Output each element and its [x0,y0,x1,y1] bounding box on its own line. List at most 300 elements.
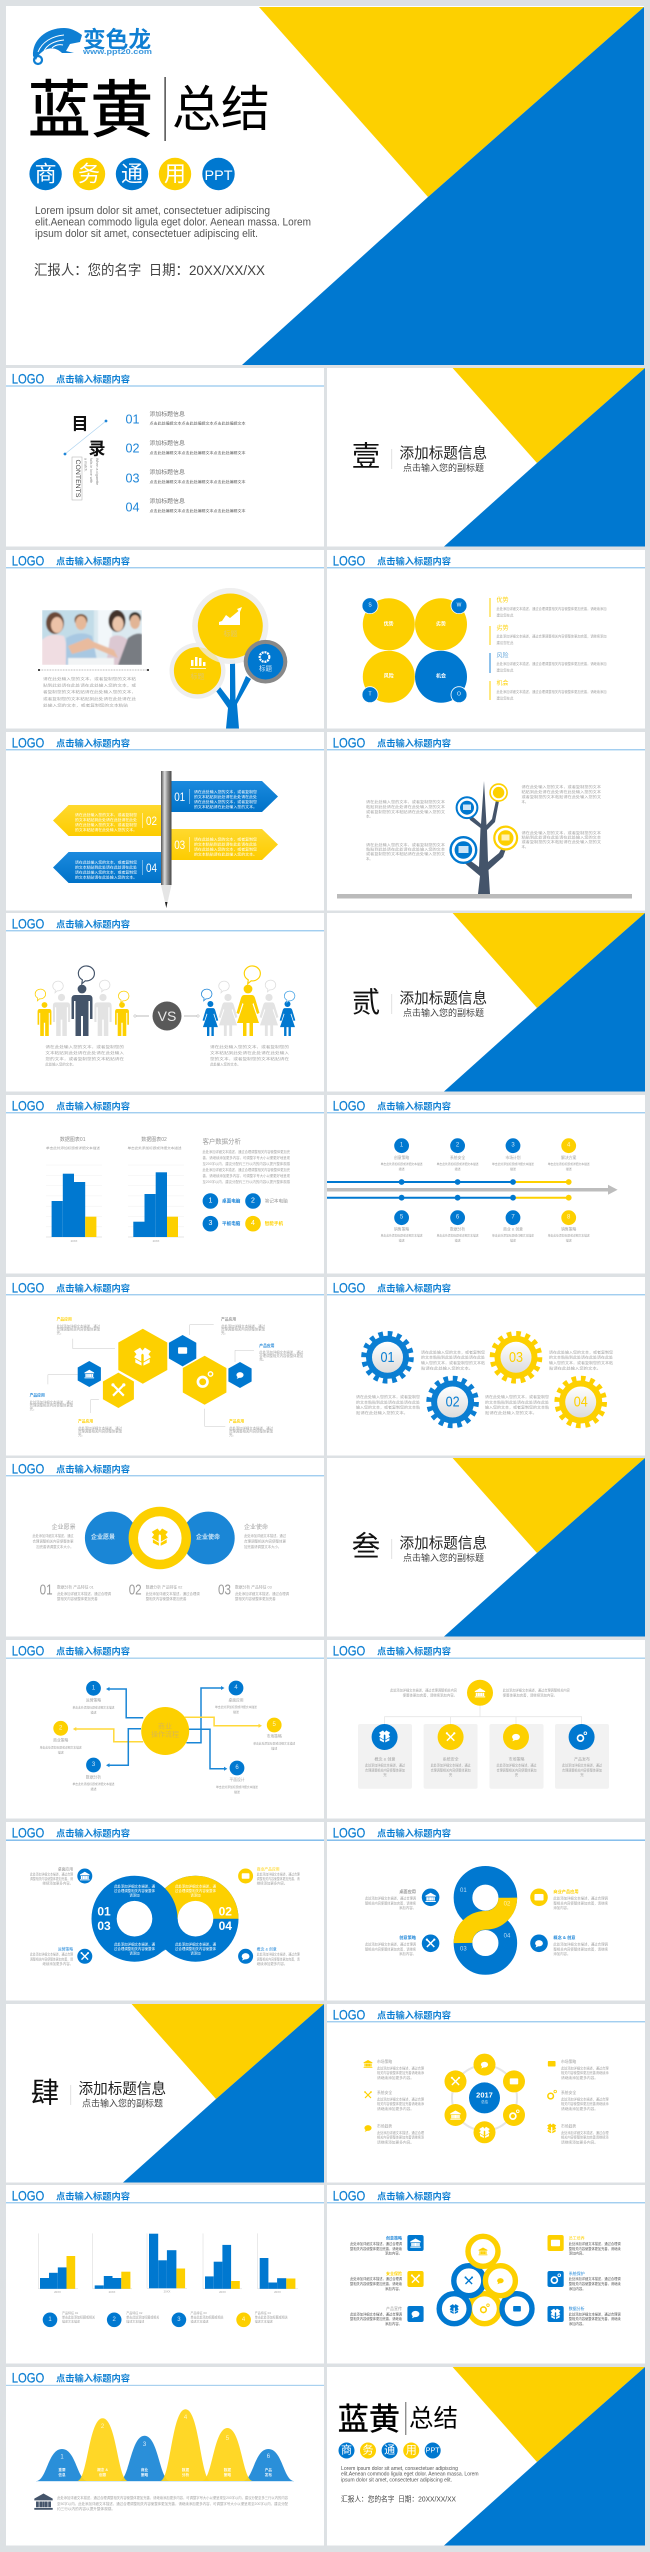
numbered notes: 此处添加详细文本描述，通过合理调 [235,1591,290,1596]
venn circles [85,1507,235,1569]
upper milestones: 创意策略 [394,1155,409,1160]
description: 至50字以内。此处添加详细文本描述，通过合理调整相关内容使整体更加完善，请继续添加更多内容，可调整字号大小以便呈现至200字以内，建议分配 [57,2501,289,2506]
section title [78,2080,166,2108]
lower milestones: 单击此处添加标题或详细文本描述 [492,1233,534,1238]
contents list: 点击此处编辑文本点击此处编辑文本点击此处编辑文本 [150,479,246,484]
infinity shape: 过合理调整相关内容使整体 [175,1946,217,1951]
panel: figure eight diagram [327,1822,645,2000]
bell curve chart: 数据 [224,2467,231,2472]
bell curve chart: 策略 [141,2472,148,2477]
infinity shape: 04 [219,1919,232,1933]
header [6,372,324,386]
panel: five mini bar charts [6,2185,324,2364]
numbered notes: 01 [40,1583,53,1599]
numbered notes: 数据分析 产品特征 03 [235,1584,272,1589]
analysis text [202,1136,291,1184]
tree diagram: 标题 [190,672,204,680]
tag circles [338,2442,441,2458]
callouts [30,1867,300,1966]
bell curve chart: 3 [143,2442,147,2448]
hexagon labels: 产品应用 [259,1343,275,1348]
contents heading: When a cigarette [95,458,99,485]
photo caption [43,676,137,708]
left icon tiles: 安全保险 [386,2270,402,2276]
card 3: 市场策略 [508,1756,524,1762]
chart 02: 数据图表02 [141,1136,167,1143]
arrow 03: 03 [174,838,185,852]
infinity shape: 此处添加详细文本描述，通 [114,1883,156,1888]
left items: 此处添加详细文本描述，通过合理 [377,2130,425,2135]
panel: column charts [6,1095,324,1274]
bell curve chart: 数据 [182,2467,189,2472]
central circle: 操作流程 [151,1730,179,1738]
SWOT circles [362,598,467,703]
SWOT legend: 此处添加详细文本描述，通过合理调整相关内容使整体更加完善，请继续添加 [496,634,607,638]
legend: 单击此处添加标题或相关 [62,2315,96,2320]
arrow 02: 请在此处输入您的文本，或者复制您 [75,822,138,827]
right items: 市场策略 [561,2059,576,2064]
right icon tiles: 数据分析 [569,2305,585,2311]
chart 01 [46,1136,102,1243]
header: LOGO [12,1098,45,1114]
orbit diagram: 2017 [476,2090,493,2100]
arrow 04: 请在此处输入您的文本，或者复制您 [75,860,138,864]
lower milestones: 描述 [455,1238,461,1243]
side notes: 此处添加详细文本描述，通过 [32,1533,74,1538]
header [327,1644,645,1659]
header: 点击输入标题内容 [56,1828,130,1838]
header: LOGO [333,554,366,568]
top node: 此处添加详细文本描述，通过合理调整相关内容 [503,1688,570,1693]
text blocks: 请在此处输入您的文本，或者复制您的文本 [522,784,602,789]
captions: 此处输入您的文本。 [45,1062,76,1066]
right icon tiles: 整相关内容使整体更加完善，请继续 [569,2281,621,2286]
infinity shape [92,1876,238,1962]
men group [35,966,129,1036]
closing title: 蓝黄 [338,2402,400,2437]
right items: 请继续添加更多内容。 [561,2106,598,2111]
header: LOGO [12,1280,45,1296]
arrow 04: 的文本粘贴到此处请在此处请在此处 [75,864,138,870]
card 4: 完 [580,1772,584,1777]
legend badges: 笔记本电脑 [265,1198,288,1204]
legend badges: 1 [208,1198,212,1204]
gear 04: 04 [574,1394,588,1411]
callouts: 继续添加更多内容。 [42,1881,73,1886]
chart 01: 单击此处添加标题或详细文本描述 [46,1145,100,1150]
right items: 请继续添加更多内容。 [561,2139,598,2144]
intro paragraph: elit.Aenean commodo ligula eget dolor. Aenean massa. Lorem [35,216,311,228]
bell curve chart: 2 [101,2424,105,2430]
arrow 04: 请在此处输入您的文本，或者复制您 [75,870,138,874]
bell curve chart: 创意 [99,2472,107,2477]
header: LOGO [12,2370,45,2386]
right icon tiles: 此处添加详细文本描述，通过合理调 [569,2276,621,2281]
legend: 单击此处添加标题或相关 [255,2315,288,2320]
SWOT circles: O [457,692,461,698]
intro paragraph: Lorem ipsum dolor sit amet, consectetuer adipiscing [35,205,270,217]
legend: 描述文本描述 [190,2319,209,2324]
photo caption: 处输入您的文本，或者复制您的文本粘贴 [43,702,129,708]
flow nodes: 单击此处添加标题或详细文本描述 [215,1704,257,1709]
card 1: 完 [383,1772,387,1777]
section title: 点击输入您的副标题 [403,1007,484,1018]
header [6,1098,324,1114]
tag circles: PPT [204,167,233,183]
hexagon labels: 完。 [57,1330,63,1335]
card 2: 此处添加详细文本描述，通过 [431,1763,471,1768]
callouts: 此处添加详细文本描述，通过合理 [30,1872,74,1877]
callouts: 调整相关内容使整体更加完善，请 [30,1956,74,1961]
upper milestones: 4 [567,1143,571,1149]
right items: 此处添加详细文本描述，通过合理 [561,2130,609,2135]
legend badges: 桌面电脑 [222,1198,241,1204]
infinity shape: 此处添加详细文本描述，通 [175,1941,217,1946]
gear captions: 贴请在此处输入您的文本。 [421,1365,473,1370]
gear captions: 贴请在此处输入您的文本。 [485,1410,537,1415]
numbered notes: 此处添加详细文本描述，通过合理调 [146,1591,200,1596]
text blocks: 粘贴到此处请在此处请在此处输入您的文本 [522,789,602,794]
bell curve chart: 重要 [58,2467,66,2472]
arrow 01 [172,781,278,812]
header: 点击输入标题内容 [56,556,130,566]
numbered notes: 数据分析 产品特征 02 [146,1584,182,1589]
right items: 请继续添加更多内容。 [561,2075,598,2080]
panel: SWOT [327,550,645,728]
hexagon labels: 产品应用 [78,1419,93,1424]
card 3: 此处添加详细文本描述，通过 [496,1763,537,1768]
lower milestones: 商业 & 创意 [503,1227,523,1232]
SWOT circles: W [457,603,462,609]
chart 02: 单击此处添加标题或详细文本描述 [128,1145,182,1150]
arrow 02: 请在此处输入您的文本，或者复制您 [75,812,138,817]
panel: ring pyramid [327,2185,645,2364]
tree diagram: 标题 [224,629,238,638]
header: 点击输入标题内容 [377,1282,451,1294]
gear captions: 请在此处输入您的文本，或者复制您 [356,1394,421,1399]
left items: 请继续添加更多内容。 [377,2075,414,2080]
arrow 03: 请在此处输入您的文本，或者复制您 [194,836,258,842]
right icon tiles: 此处添加详细文本描述，通过合理调 [569,2312,621,2316]
title [28,76,270,146]
callouts: 添加内容。 [553,1951,570,1956]
gear captions: 输入您的文本，或者复制您的文本粘 [485,1405,550,1410]
callouts: 此处添加详细文本描述，通过合理 [30,1952,74,1957]
callouts: 运营策略 [58,1947,73,1952]
arrow 03 [172,829,278,860]
SWOT circles: 劣势 [436,620,446,627]
hexagon labels: 产品应用 [30,1393,45,1398]
upper milestones: 描述 [510,1166,516,1171]
legend: 描述文本描述 [255,2319,273,2324]
hexagon labels: 此处添加详细文本描述，通过 [259,1350,304,1355]
arrow 03: 请在此处输入您的文本，或者复制您 [194,846,258,852]
SWOT legend: 劣势 [496,624,509,632]
upper milestones: 单击此处添加标题或详细文本描述 [381,1161,423,1166]
panel: hexagons [6,1277,324,1456]
left icon tiles: 创意策略 [386,2235,402,2241]
figure eight: 04 [504,1933,511,1939]
lower milestones [381,1210,590,1243]
infinity shape: 过合理调整相关内容使整体 [114,1946,156,1951]
panel: gears [327,1277,645,1456]
callouts: 继续添加更多内容。 [257,1961,287,1966]
venn circles: 企业愿景 [91,1533,115,1541]
left icon tiles: 整相关内容使整体更加完善，请继续 [350,2281,403,2286]
hexagon labels: 完。 [78,1432,85,1437]
text blocks: 请在此处输入您的文本，或者复制您的文本 [366,799,446,804]
legend: 产品特征 03 [190,2310,207,2315]
section numeral: 叁 [352,1531,380,1563]
tag circles: 务 [362,2444,374,2456]
header: 点击输入标题内容 [377,2010,451,2020]
contents list: 添加标题信息 [150,468,185,476]
card 2: 系统安全 [443,1756,459,1762]
section title [400,1535,487,1563]
infinity shape: 请添加 [190,1893,201,1898]
flow nodes: 描述 [233,1709,239,1714]
bar chart 5: 20XX [274,2290,281,2294]
hexagon labels: 此处添加详细文本描述，通过 [57,1323,101,1328]
gear captions: 的文本粘贴到此处请在此处请在此处 [421,1355,486,1360]
gear captions: 输入您的文本，或者复制您的文本粘 [421,1360,486,1365]
callouts: 添加内容。 [553,1905,570,1910]
gear 02 [429,1378,476,1426]
photo caption: 者复制您的文本粘贴请在此处输入您的文本， [43,689,136,694]
panel: section three [327,1458,645,1636]
header: LOGO [333,1280,366,1296]
card 1: 概念 & 创意 [375,1756,395,1762]
gear 01 [364,1334,411,1381]
left items: 请继续添加更多内容。 [377,2139,414,2144]
contents heading: CONTENTS [74,460,80,498]
left items: 请继续添加更多内容。 [377,2106,414,2111]
contents list: 点击此处编辑文本点击此处编辑文本点击此处编辑文本 [150,420,246,426]
arrow 01: 请在此处输入您的文本，或者复制您 [194,789,258,794]
section numeral: 肆 [31,2078,59,2110]
panel: cover slide [6,6,644,365]
arrow 04: 的文本粘贴请在此处输入您的文本。 [75,874,137,880]
hexagon labels: 完。 [30,1406,36,1411]
right items: 此处添加详细文本描述，通过合理 [561,2097,609,2102]
panel: timeline [327,1095,645,1274]
header [6,1462,324,1476]
left items: 此处添加详细文本描述，通过合理 [377,2097,425,2102]
SWOT circles: 风险 [384,673,394,680]
panel: bell curves [6,2367,324,2546]
ring pyramid [439,2236,532,2324]
reporter line: 汇报人：您的名字 日期：20XX/XX/XX [341,2494,456,2503]
bar chart 1 [38,2233,78,2294]
header: 点击输入标题内容 [56,1100,130,1112]
legend: 单击此处添加标题或相关 [190,2315,224,2320]
side notes: 此处添加详细文本描述，通过 [244,1533,287,1538]
header: 点击输入标题内容 [377,556,451,566]
hexagon labels: 完。 [259,1356,266,1361]
ground [337,894,632,898]
panel: infinity diagram [6,1822,324,2000]
analysis text: 此处添加详细文本描述，通过合理调整相关内容使整体更加完 [202,1167,291,1172]
right icon tiles [548,2235,621,2326]
SWOT circles: T [368,692,372,698]
gear captions: 输入您的文本，或者复制您的文本粘 [356,1405,421,1410]
contents list [126,410,246,514]
logo text: www.ppt20.com [82,49,152,56]
flow nodes: 平面设计 [229,1777,245,1782]
legend: 1 [48,2317,52,2323]
bell curve chart: 5 [226,2436,230,2442]
text blocks: 或者复制您的文本粘贴请在此处输入您的文 [366,809,446,814]
header: LOGO [333,1098,366,1114]
right icon tiles: 整相关内容使整体更加完善，请继续 [569,2316,621,2321]
pencil [161,771,172,908]
icon: bank [34,2493,53,2510]
section title: 点击输入您的副标题 [403,1552,484,1563]
flow nodes: 描述 [58,1749,64,1754]
callouts: 桌面应用 [58,1867,73,1872]
callouts: 此处添加详细文本描述，通过合理调 [553,1942,609,1947]
side notes: 企业使命 [244,1523,268,1531]
chart 01: 20XX [71,1239,78,1243]
header [6,1280,324,1296]
hexagon labels: 完。 [221,1330,228,1335]
gear captions: 请在此处输入您的文本，或者复制您 [421,1349,486,1354]
card 2 [424,1724,478,1789]
captions: 您的文本，或者复制您的文本粘贴请在 [45,1056,125,1061]
callouts: 商业产品应用 [257,1867,280,1872]
connectors [48,1325,254,1426]
chart 02 [128,1136,184,1243]
icon: bars [190,657,206,669]
flow nodes: 描述 [271,1746,277,1750]
lower milestones: 7 [511,1215,515,1221]
header [6,1826,324,1841]
header: LOGO [333,736,366,750]
left items: 市场趋势 [377,2124,392,2129]
header: 点击输入标题内容 [56,1464,130,1474]
analysis text: 善，请继续添加更多内容，可调整字号大小以便更好地呈现 [202,1173,291,1178]
left icon tiles: 此处添加详细文本描述，通过合理调 [350,2241,403,2246]
tag circles: 通 [121,162,143,186]
upper milestones: 解决方案 [561,1155,576,1160]
contents list: 添加标题信息 [150,497,185,505]
callouts: 添加内容。 [399,1951,416,1956]
header: 点击输入标题内容 [56,1646,130,1656]
flow nodes: 6 [235,1765,239,1771]
SWOT circles: 优势 [384,620,394,627]
flow nodes: 3 [92,1762,96,1768]
hexagon labels: 产品应用 [221,1317,236,1322]
text blocks: 或者复制您的文本粘贴请在此处输入您的文 [522,839,602,844]
text blocks: 粘贴到此处请在此处请在此处输入您的文本 [522,834,602,840]
figure eight: 02 [504,1901,511,1907]
header: LOGO [12,1826,45,1840]
callouts: 概念 & 创意 [257,1947,277,1952]
SWOT legend: 此处添加详细文本描述，通过合理调整相关内容使整体更加完善，请继续添加 [496,661,607,666]
gear 03 [492,1334,540,1381]
contents list: 点击此处编辑文本点击此处编辑文本点击此处编辑文本 [150,450,246,455]
gear captions: 贴请在此处输入您的文本。 [356,1410,408,1415]
bell curve chart: 信息 [58,2472,66,2477]
arrow 02: 的文本粘贴到此处请在此处请在此处 [75,817,138,822]
figure eight [460,1875,511,1965]
right icon tiles: 员工培养 [569,2235,585,2241]
header: 点击输入标题内容 [377,738,451,748]
left icon tiles: 此处添加详细文本描述，通过合理调 [350,2276,403,2281]
tag circles: 商 [341,2442,352,2456]
description: 此处添加详细文本描述，通过合理调整相关内容使整体更加完善，请继续添加更多内容，可调整字号大小以便呈现至200字以内，建议分配至多三行以内的内容 [57,2495,289,2500]
side notes: 企业愿景 [52,1523,76,1531]
left items: 相关内容使整体更加完善请继续添 [377,2070,425,2075]
lower milestones: 8 [567,1215,571,1221]
panel: tree with rings [327,732,645,910]
tag circles: 用 [164,162,186,186]
section title: 添加标题信息 [400,445,487,462]
analysis text: 至200字以内，建议分配约三行以内的内容以提升整体观感 [202,1161,291,1166]
side notes: 合理调整相关内容使整体更 [244,1539,287,1544]
upper milestones: 单击此处添加标题或详细文本描述 [548,1161,590,1166]
header: LOGO [333,1644,366,1658]
header: 点击输入标题内容 [377,2190,451,2202]
hexagon labels [30,1317,304,1437]
callouts: 整相关内容使整体更加完善，请继续 [365,1900,417,1905]
flow nodes: 描述 [90,1786,97,1791]
callouts: 此处添加详细文本描述，通过合理调 [553,1896,609,1901]
arrow 02: 的文本粘贴请在此处输入您的文本。 [75,827,137,832]
section title: 添加标题信息 [400,990,487,1007]
lower milestones: 6 [456,1215,460,1221]
callouts: 继续添加更多内容。 [42,1961,73,1966]
chart 01: 数据图表01 [60,1136,86,1143]
flow nodes: 单击此处添加标题或详细文本描述 [40,1744,82,1749]
upper milestones: 单击此处添加标题或详细文本描述 [437,1161,479,1166]
panel: vision and mission [6,1458,324,1636]
upper milestones: 描述 [455,1166,461,1171]
infinity shape: 请添加 [190,1951,201,1956]
legend: 描述文本描述 [62,2319,80,2324]
legend badges: 2 [251,1198,255,1204]
gear 03: 03 [509,1349,523,1366]
bell curve chart: 策略 [224,2472,231,2477]
flow nodes: 单击此处添加标题或详细文本描述 [72,1704,114,1709]
left icon tiles: 此处添加详细文本描述，通过合理调 [350,2312,403,2316]
captions: 此处输入您的文本。 [210,1062,241,1066]
left items: 市场策略 [377,2059,392,2064]
left items: 此处添加详细文本描述，通过合理 [377,2066,425,2070]
tree diagram: 标题 [259,664,272,672]
hexagon labels: 合理调整相关内容使整体更加 [78,1429,123,1434]
analysis text: 此处添加详细文本描述，通过合理调整相关内容使整体更加完 [202,1149,291,1154]
numbered notes: 03 [218,1583,231,1599]
lower milestones: 5 [400,1215,404,1221]
arrow 04: 04 [146,861,157,875]
contents heading: 目 [72,414,88,434]
panel: tree with photo [6,550,324,728]
SWOT legend: 此处添加详细文本描述，通过合理调整相关内容使整体更加完善，请继续添加 [496,606,607,611]
section title [400,445,487,473]
analysis text: 至200字以内，建议分配约三行以内的内容以提升整体观感 [202,1179,291,1184]
legend: 4 [242,2317,246,2323]
infinity shape: 01 [97,1904,111,1918]
flow nodes: 2 [59,1725,63,1731]
section numeral: 壹 [352,441,380,473]
text blocks: 本。 [522,844,528,849]
infinity shape: 请添加 [129,1951,140,1956]
bell curve chart: 4 [184,2415,188,2421]
text blocks: 请在此处输入您的文本，或者复制您的文本 [366,842,446,847]
legend: 单击此处添加标题或相关 [126,2315,160,2320]
header [327,1098,645,1114]
